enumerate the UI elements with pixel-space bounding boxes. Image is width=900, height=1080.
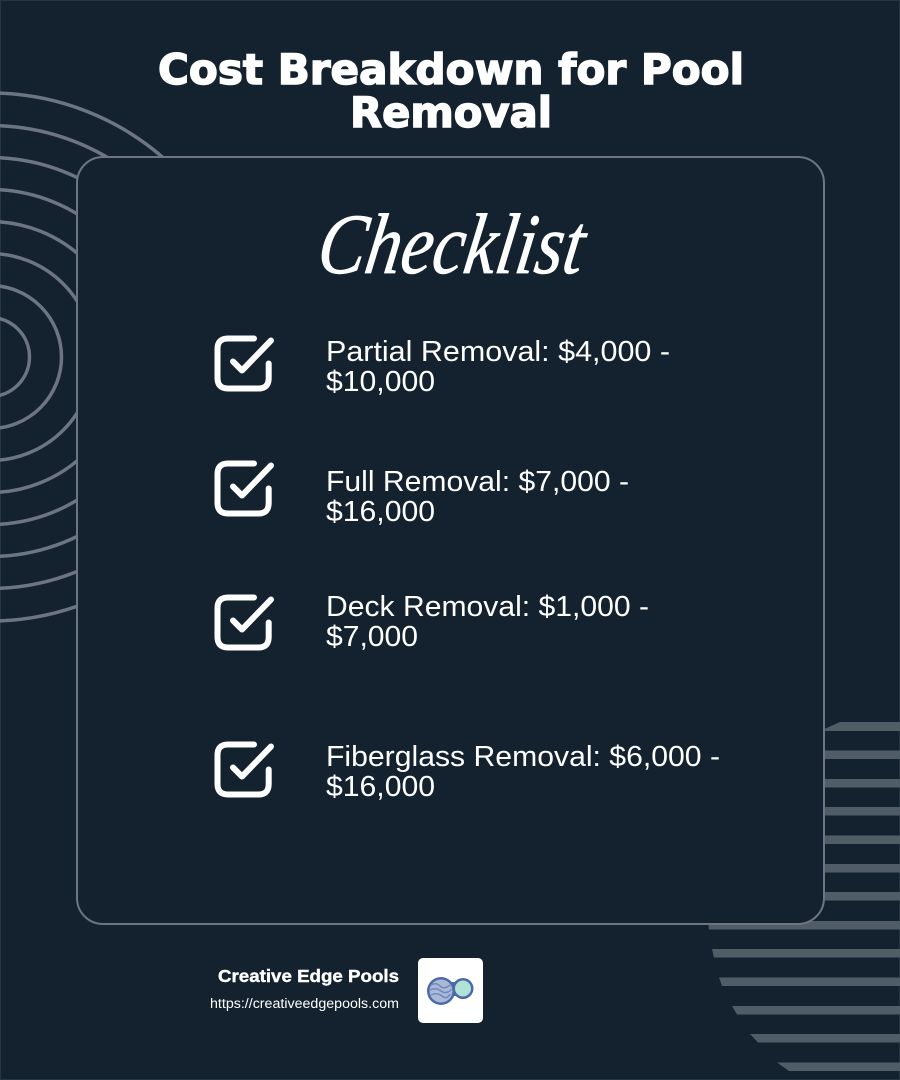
footer brand text: Creative Edge Pools — [218, 966, 399, 986]
text: full removal cost: Full Removal: $7,000 - — [326, 466, 629, 498]
text: deck removal cost — [326, 591, 649, 653]
heading: Checklist: Checklist — [312, 196, 594, 292]
text: partial removal cost: Partial Removal: $4,000 - — [326, 336, 670, 368]
logo — [418, 958, 483, 1023]
text: fiberglass removal cost: Fiberglass Removal: $6,000 - — [326, 741, 720, 773]
checklist item: partial removal — [218, 336, 670, 398]
footer brand text — [210, 966, 399, 1011]
text: deck removal cost: Deck Removal: $1,000 - — [326, 591, 649, 623]
icon: checkbox — [218, 338, 271, 388]
text: full removal cost: $16,000 — [326, 496, 435, 528]
decorative concentric circles — [0, 93, 254, 621]
icon: pool shape — [427, 977, 474, 1005]
decorative horizontal stripes — [708, 722, 900, 1071]
text: full removal cost — [326, 466, 629, 528]
footer brand text: https://creativeedgepools.com — [210, 996, 399, 1011]
text: fiberglass removal cost — [326, 741, 720, 803]
text: fiberglass removal cost: $16,000 — [326, 771, 435, 803]
checklist item: fiberglass removal — [218, 741, 720, 803]
panel: checklist card — [77, 157, 824, 924]
checklist item: deck removal — [218, 591, 649, 653]
title: Cost Breakdown for Pool — [158, 45, 744, 94]
checklist item: full removal — [218, 464, 629, 528]
title: Removal — [350, 88, 552, 137]
text: deck removal cost: $7,000 — [326, 621, 418, 653]
title — [158, 45, 744, 137]
icon: checkbox — [218, 744, 271, 794]
text: partial removal cost — [326, 336, 670, 398]
text: partial removal cost: $10,000 — [326, 366, 435, 398]
icon: checkbox — [218, 598, 271, 648]
icon: checkbox — [218, 464, 271, 514]
